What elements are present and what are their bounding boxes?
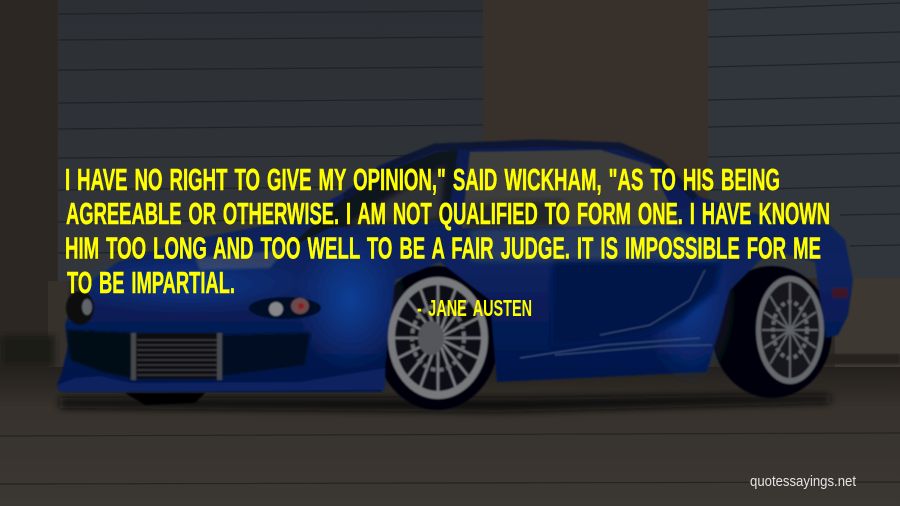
- lower concrete: [0, 278, 900, 368]
- side window: [462, 150, 680, 228]
- rear wheel rim: [756, 276, 824, 384]
- front fender highlight: [295, 230, 405, 370]
- car shadow: [60, 395, 830, 412]
- rear lamp: [832, 288, 848, 298]
- splitter: [57, 368, 385, 392]
- chin spoiler: [125, 393, 205, 405]
- ground: [0, 367, 900, 506]
- car: [57, 140, 853, 410]
- pillar: [483, 0, 708, 240]
- window lower reflection: [465, 200, 560, 228]
- front tyre: [375, 266, 499, 410]
- left wall: [0, 0, 57, 367]
- front lamps: [249, 297, 321, 319]
- author attribution: - JANE AUSTEN: [417, 295, 532, 321]
- air intakes: [67, 330, 310, 378]
- rear quarter highlight: [645, 215, 735, 385]
- hood blue: [60, 255, 320, 315]
- windshield: [285, 150, 458, 250]
- rear tyre: [712, 266, 832, 398]
- body: [57, 140, 853, 392]
- watermark: quotessayings.net: [750, 473, 857, 490]
- door panel: [553, 262, 722, 345]
- left door: [58, 0, 483, 281]
- grille: [131, 333, 222, 380]
- quote text: TO BE IMPARTIAL.: [67, 265, 235, 300]
- windshield reflection: [345, 165, 445, 226]
- roof trim: [345, 143, 695, 198]
- sill lines: [520, 270, 712, 358]
- left headlight: [66, 291, 94, 325]
- right door: [708, 0, 900, 278]
- front wheel rim: [388, 277, 488, 399]
- upper door band: [470, 225, 722, 262]
- quote text: [65, 162, 830, 300]
- hood reflection: [195, 250, 285, 270]
